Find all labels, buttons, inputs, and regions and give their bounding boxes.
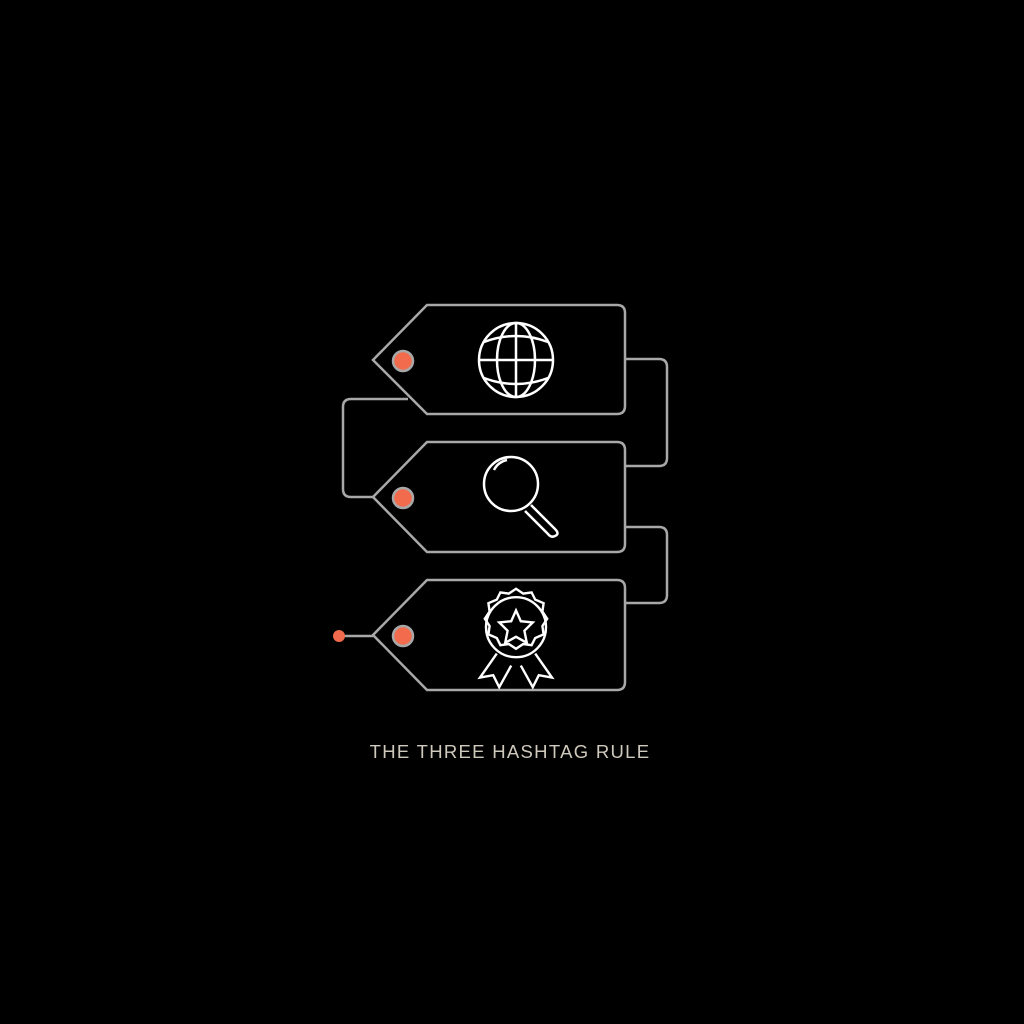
dots <box>333 351 413 646</box>
title: THE THREE HASHTAG RULE <box>370 741 650 762</box>
icon: award badge <box>480 589 552 687</box>
connectors <box>339 359 667 636</box>
icon: magnifier <box>484 457 558 537</box>
tag 3 <box>373 580 625 690</box>
tag 1 <box>373 305 625 414</box>
tag 2 <box>373 442 625 552</box>
icon: globe <box>479 323 553 397</box>
